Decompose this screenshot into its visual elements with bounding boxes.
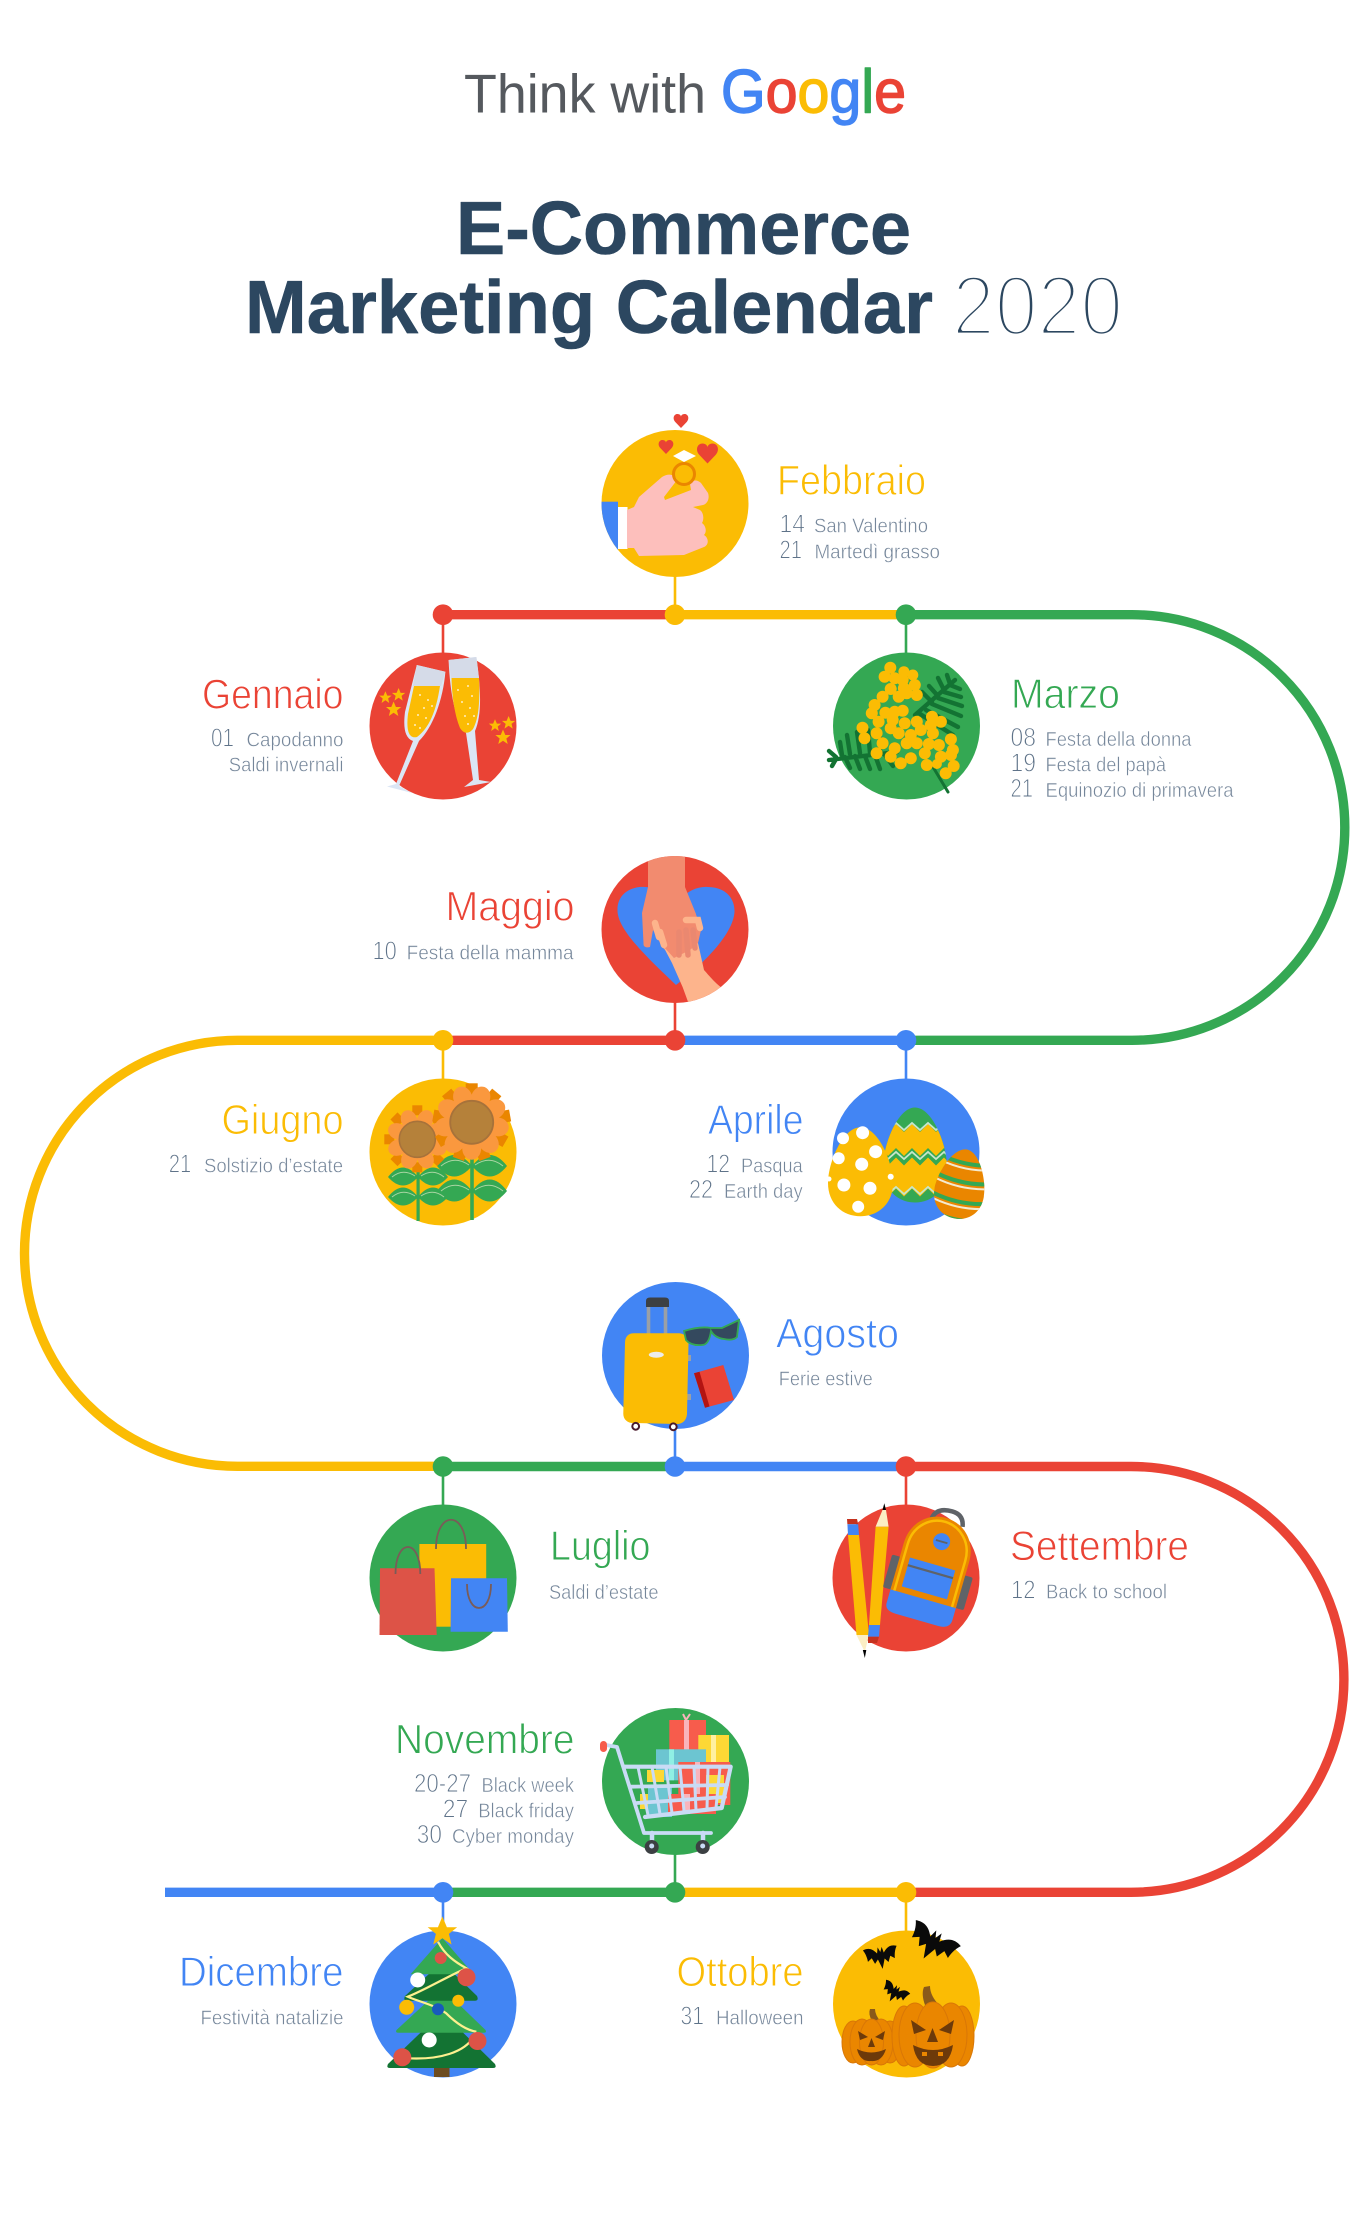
text: Novembre: Black friday (478, 1801, 574, 1823)
text: Aprile: Pasqua (741, 1156, 803, 1178)
text: Marzo (1010, 670, 1234, 803)
text: Aprile: Earth day (724, 1181, 803, 1203)
text: Novembre: Novembre (395, 1715, 574, 1762)
panel: Aprile (689, 1078, 996, 1226)
panel: Maggio (372, 850, 748, 1010)
timeline path (25, 615, 1345, 1892)
text: Novembre (395, 1715, 575, 1849)
text: Dicembre: Dicembre (179, 1948, 344, 1995)
icon: pencils and backpack (832, 1499, 989, 1658)
text: Giugno (169, 1096, 344, 1179)
text: Luglio: Luglio (550, 1522, 650, 1569)
icon: pumpkins and bats (833, 1919, 980, 2078)
text: Marzo: 21 (1010, 773, 1033, 803)
text: Gennaio: 01 (211, 723, 234, 753)
icon: champagne glasses (370, 652, 516, 800)
text: Settembre: Back to school (1046, 1582, 1167, 1604)
text: Giugno: Solstizio d’estate (204, 1156, 343, 1178)
text: Maggio: 10 (372, 935, 397, 965)
panel: Agosto (602, 1282, 899, 1430)
text: Agosto: Agosto (776, 1309, 899, 1356)
text: Ottobre: Halloween (716, 2007, 804, 2029)
icon: hand with ring (600, 414, 748, 577)
text: Gennaio: Capodanno (246, 730, 344, 752)
text: Aprile: 22 (689, 1174, 713, 1204)
text: Ottobre: 31 (680, 2000, 704, 2030)
text: Febbraio: 14 (780, 509, 805, 539)
text: Marzo: Equinozio di primavera (1046, 780, 1234, 802)
title: E-Commerce (456, 186, 911, 270)
text: Marzo: 08 (1010, 722, 1036, 752)
text: Maggio: Maggio (446, 883, 574, 930)
text: Ottobre: Ottobre (676, 1948, 804, 1995)
icon: shopping bags (370, 1504, 516, 1652)
text: Giugno: Giugno (222, 1096, 344, 1143)
text: Febbraio: San Valentino (814, 516, 928, 538)
text: Giugno: 21 (169, 1149, 191, 1179)
text: Aprile (689, 1096, 804, 1204)
icon: christmas tree (370, 1916, 516, 2078)
text: Gennaio: Saldi invernali (229, 755, 344, 777)
panel: Novembre (395, 1708, 749, 1855)
timeline nodes and connectors (433, 570, 916, 1935)
text: Febbraio: Febbraio (777, 456, 926, 503)
text: Settembre (1010, 1522, 1189, 1605)
text: Febbraio (777, 456, 940, 565)
text: Novembre: Black week (482, 1775, 575, 1797)
text: Aprile: Aprile (708, 1096, 804, 1143)
panel: Gennaio (202, 652, 516, 800)
text: Settembre: 12 (1011, 1575, 1036, 1605)
text: Luglio (549, 1522, 658, 1604)
icon: mimosa (829, 652, 980, 800)
logo: Think with Google (464, 58, 906, 126)
panel: Giugno (169, 1078, 517, 1226)
text: Febbraio: Martedì grasso (814, 542, 940, 564)
logo: Think with Google: Think with (464, 62, 706, 124)
text: Settembre: Settembre (1010, 1522, 1189, 1569)
panel: Settembre (832, 1499, 1189, 1658)
icon: suitcase, sunglasses, book (602, 1282, 749, 1430)
text: Marzo: Festa del papà (1046, 755, 1167, 777)
text: Dicembre (179, 1948, 344, 2029)
title: Marketing Calendar (245, 265, 933, 349)
icon: sunflowers (370, 1078, 516, 1226)
panel: Dicembre (179, 1916, 516, 2078)
text: Marzo: Festa della donna (1046, 729, 1192, 751)
panel: Marzo (829, 652, 1234, 803)
logo: Think with Google: Google (721, 58, 906, 126)
text: Marzo: 19 (1010, 748, 1036, 778)
text: Maggio (372, 883, 574, 965)
text: Agosto: Ferie estive (779, 1369, 873, 1391)
panel: Febbraio (600, 414, 940, 577)
text: Novembre: 30 (417, 1819, 442, 1849)
title: 2020 (952, 259, 1123, 354)
text: Aprile: 12 (706, 1149, 730, 1179)
icon: easter eggs (826, 1078, 996, 1226)
text: Agosto (776, 1309, 899, 1391)
text: Marzo: Marzo (1011, 670, 1120, 717)
text: Gennaio: Gennaio (202, 670, 344, 717)
icon: shopping cart with gifts (600, 1708, 749, 1855)
text: Gennaio (202, 670, 344, 777)
icon: hands and heart (602, 850, 748, 1010)
text: Novembre: 27 (443, 1794, 468, 1824)
text: Maggio: Festa della mamma (407, 942, 574, 964)
text: Febbraio: 21 (780, 535, 802, 565)
text: Dicembre: Festività natalizie (200, 2007, 344, 2029)
panel: Luglio (370, 1504, 658, 1652)
text: Luglio: Saldi d’estate (549, 1582, 658, 1604)
text: Novembre: Cyber monday (452, 1826, 574, 1848)
panel: Ottobre (676, 1919, 980, 2078)
title (245, 186, 1123, 354)
text: Ottobre (676, 1948, 804, 2030)
text: Novembre: 20-27 (414, 1768, 471, 1798)
